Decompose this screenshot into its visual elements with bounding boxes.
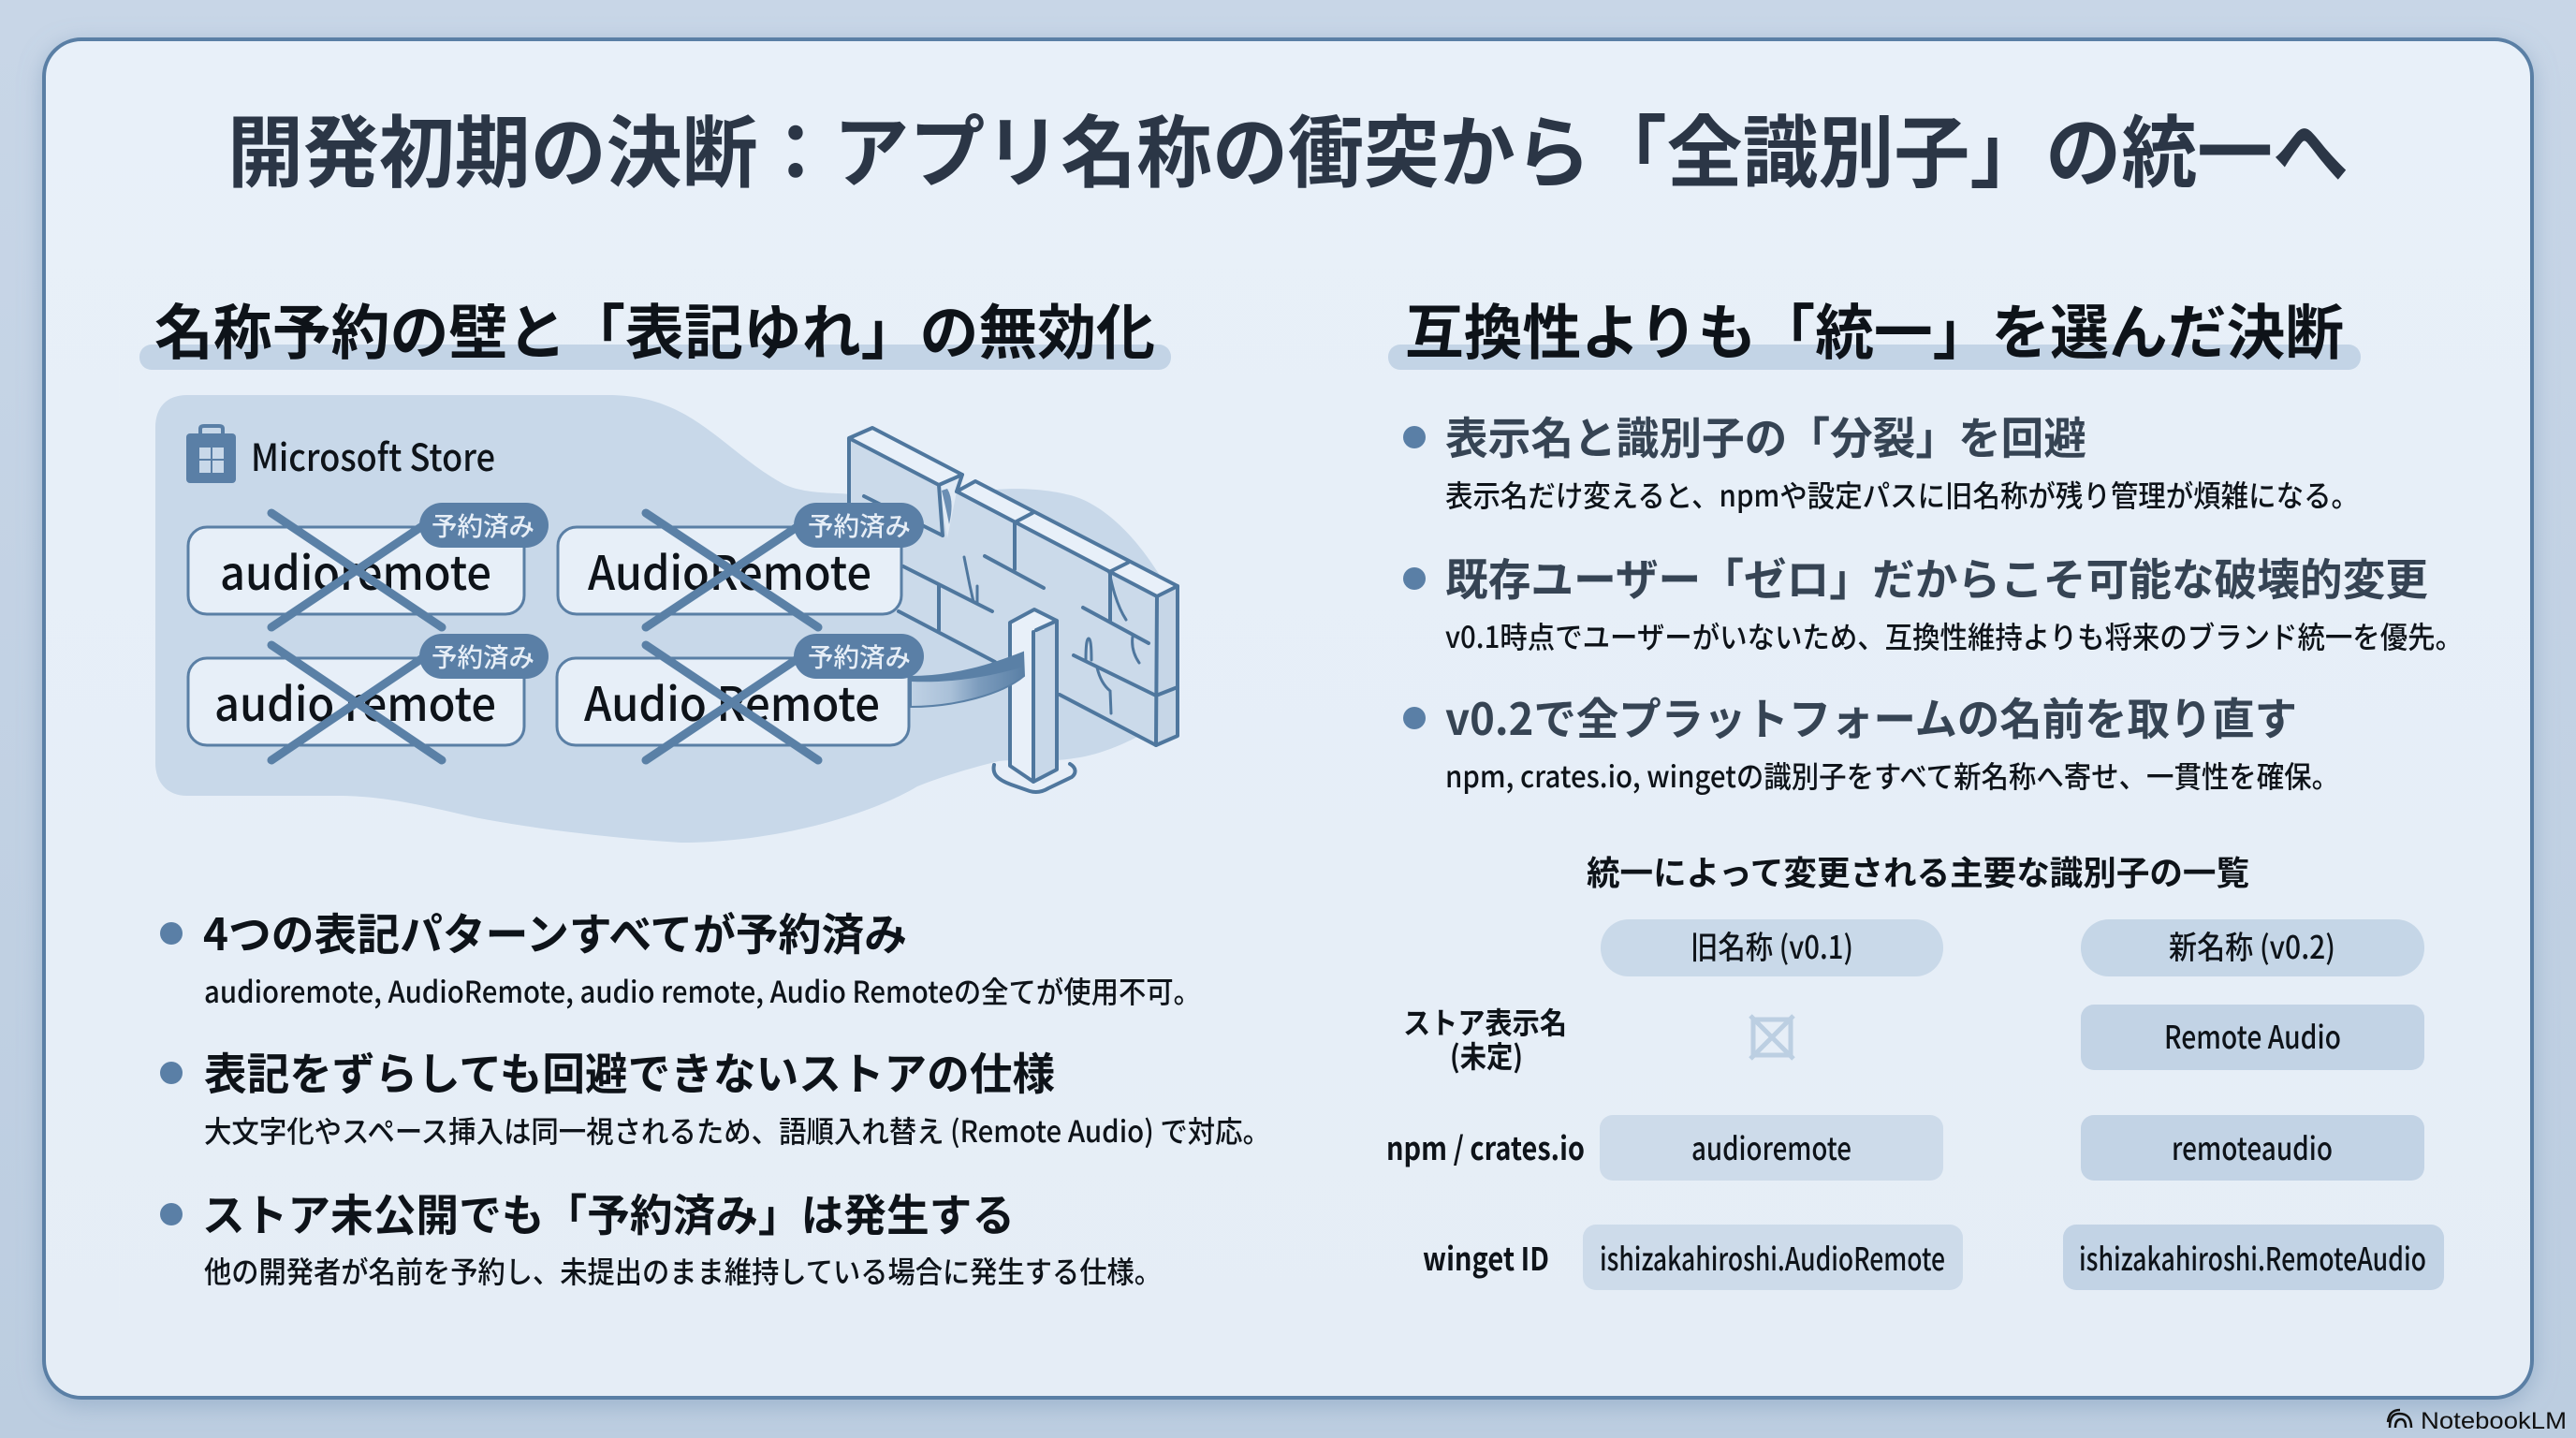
cell: ishizakahiroshi.RemoteAudio: ishizakahiroshi.RemoteAudio [2079, 1234, 2426, 1280]
left bullet 3: 他の開発者が名前を予約し、未提出のまま維持している場合に発生する仕様。 [204, 1249, 1162, 1292]
icon: Microsoft Store [186, 426, 236, 483]
row label: npm / crates.io: npm / crates.io [1386, 1123, 1585, 1169]
row label: winget ID: winget ID [1423, 1234, 1549, 1280]
card: audio remote: audio remote [214, 668, 496, 735]
right bullet 3: v0.2で全プラットフォームの名前を取り直す [1445, 683, 2297, 748]
right bullet 3: npm, crates.io, wingetの識別子をすべて新名称へ寄せ、一貫性を確保。 [1445, 754, 2339, 797]
column header: old name [1601, 919, 1943, 976]
row label: store display name [1403, 1000, 1567, 1077]
card: AudioRemote [558, 503, 924, 627]
right bullet 2: 既存ユーザー「ゼロ」だからこそ可能な破壊的変更 [1445, 544, 2428, 609]
card: AudioRemote: 予約済み [808, 506, 911, 544]
identifier table [1386, 846, 2444, 1290]
cell: Remote Audio: Remote Audio [2164, 1012, 2341, 1058]
row label: store display name: (未定) [1450, 1034, 1523, 1077]
column header: new name [2081, 919, 2424, 976]
card: Audio Remote [557, 634, 924, 760]
cell: ishizakahiroshi.AudioRemote [1583, 1225, 1963, 1290]
post and ribbon [911, 609, 1076, 792]
left bullet 3: ストア未公開でも「予約済み」は発生する [202, 1180, 1015, 1244]
card: audioremote [188, 503, 549, 627]
cell: remoteaudio: remoteaudio [2172, 1123, 2333, 1169]
left bullet 3 [160, 1180, 1162, 1292]
left heading: 名称予約の壁と「表記ゆれ」の無効化 [154, 286, 1155, 372]
card: audio remote [188, 634, 549, 760]
store label: Microsoft Store [251, 428, 495, 482]
card: audio remote: 予約済み [432, 638, 534, 675]
left bullet 1: audioremote, AudioRemote, audio remote, Audio Remoteの全てが使用不可。 [204, 969, 1201, 1012]
table heading: 統一によって変更される主要な識別子の一覧 [1587, 846, 2249, 895]
column header: new name: 新名称 (v0.2) [2169, 922, 2335, 968]
illustration: store names blocked by a wall [155, 395, 1178, 843]
card: audioremote: audioremote [220, 536, 491, 604]
right bullet 1: 表示名だけ変えると、npmや設定パスに旧名称が残り管理が煩雑になる。 [1445, 473, 2359, 516]
cell: audioremote: audioremote [1691, 1123, 1852, 1169]
cell: audioremote [1600, 1115, 1943, 1181]
column header: old name: 旧名称 (v0.1) [1690, 922, 1853, 968]
right bullet 2: v0.1時点でユーザーがいないため、互換性維持よりも将来のブランド統一を優先。 [1445, 614, 2463, 657]
left bullet 2 [160, 1038, 1270, 1152]
card: audioremote: 予約済み [432, 506, 534, 544]
card: AudioRemote: AudioRemote [588, 536, 871, 604]
cell: ishizakahiroshi.AudioRemote: ishizakahiroshi.AudioRemote [1600, 1234, 1945, 1280]
NotebookLM watermark: NotebookLM [2421, 1408, 2567, 1434]
left bullet 1 [160, 899, 1201, 1012]
card: Audio Remote: 予約済み [808, 638, 911, 675]
right bullet 2 [1403, 544, 2463, 657]
right heading: 互換性よりも「統一」を選んだ決断 [1405, 286, 2344, 372]
card: Audio Remote: Audio Remote [584, 668, 880, 735]
left bullet 2: 大文字化やスペース挿入は同一視されるため、語順入れ替え (Remote Audio) で対応。 [204, 1108, 1270, 1152]
row label: store display name: ストア表示名 [1403, 1000, 1567, 1043]
right bullet 1 [1403, 403, 2359, 516]
cell: Remote Audio [2081, 1005, 2424, 1070]
brick wall [849, 428, 1178, 745]
left bullet 2: 表記をずらしても回避できないストアの仕様 [204, 1038, 1055, 1103]
right bullet 3 [1403, 683, 2339, 797]
left bullet 1: 4つの表記パターンすべてが予約済み [203, 899, 907, 963]
cell: remoteaudio [2081, 1115, 2424, 1181]
blob background [155, 395, 1165, 843]
right bullet 1: 表示名と識別子の「分裂」を回避 [1445, 403, 2086, 467]
icon: not available [1750, 1016, 1793, 1059]
cell: ishizakahiroshi.RemoteAudio [2063, 1225, 2444, 1290]
title: 開発初期の決断：アプリ名称の衝突から「全識別子」の統一へ [227, 91, 2349, 204]
